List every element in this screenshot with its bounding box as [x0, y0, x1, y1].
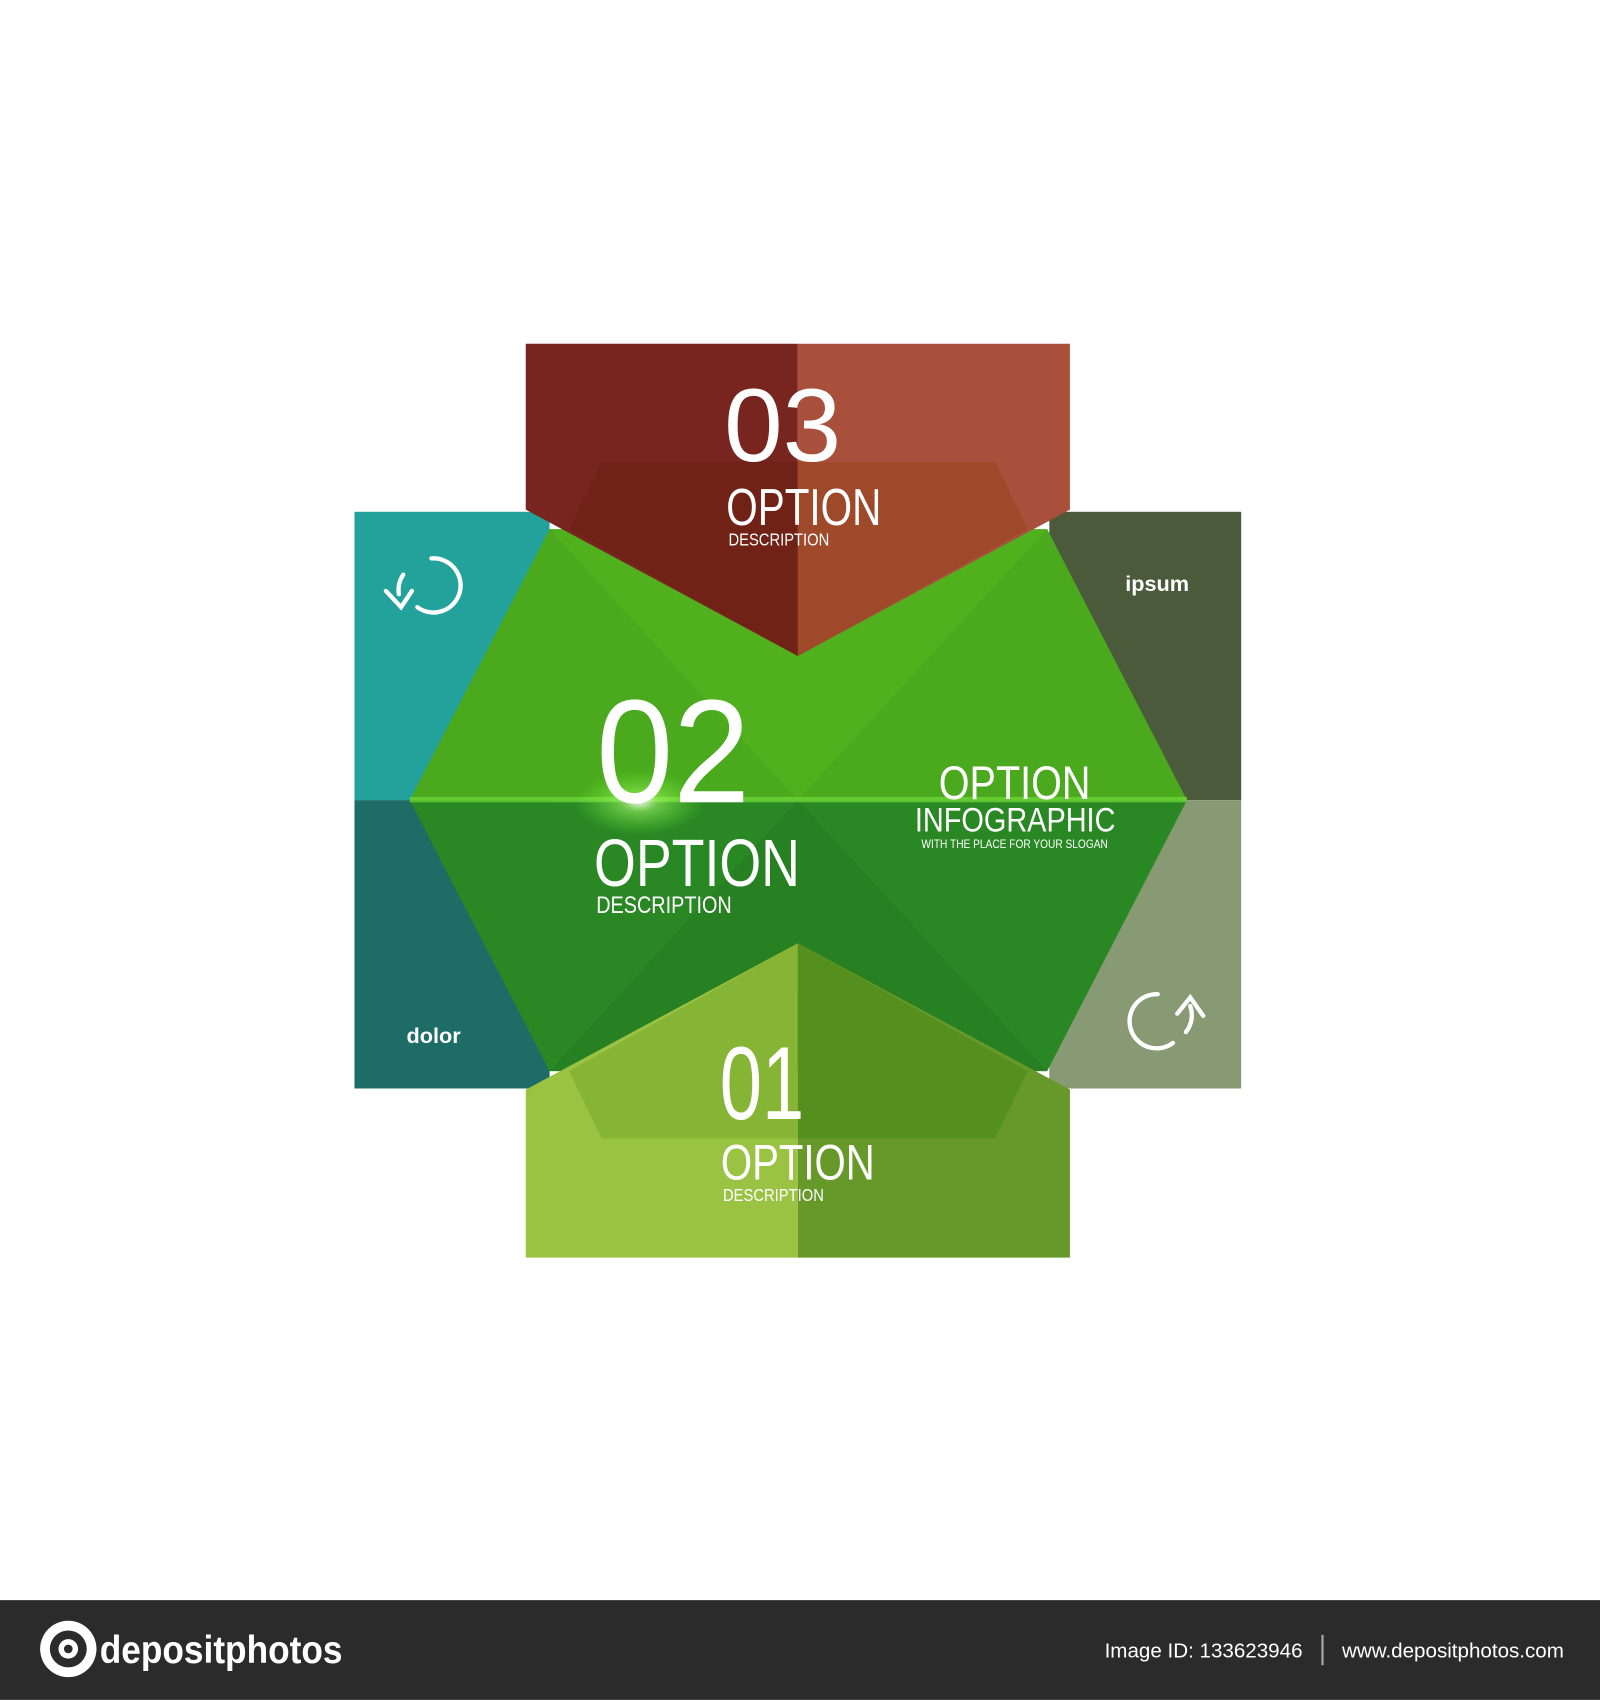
text: option infographic slogan — [915, 757, 1115, 851]
panel: right olive — [1049, 512, 1241, 1088]
footer: depositphotos — [100, 1629, 343, 1672]
text: 03 option — [724, 368, 881, 549]
text: 01 option: OPTION — [721, 1135, 875, 1191]
text: ipsum: ipsum — [1125, 571, 1189, 596]
text: 02 option: 02 — [596, 670, 750, 834]
text: 03 option: 03 — [724, 368, 841, 484]
panel: central green hexagon — [410, 529, 1187, 1071]
footer: Image ID: 133623946 — [1105, 1640, 1303, 1663]
text: 01 option: 01 — [720, 1026, 804, 1142]
panel: left teal — [354, 512, 550, 1088]
text: 01 option: DESCRIPTION — [723, 1185, 824, 1205]
text: 01 option — [720, 1026, 875, 1205]
icon: circular arrow left — [386, 558, 461, 613]
text: 03 option: DESCRIPTION — [728, 529, 829, 549]
text: option infographic slogan: INFOGRAPHIC — [915, 802, 1115, 840]
footer: www.depositphotos.com — [1341, 1640, 1564, 1663]
text: 02 option: OPTION — [594, 826, 800, 901]
text: 02 option — [594, 670, 800, 919]
panel: top option 03 — [526, 344, 1070, 656]
text: option infographic slogan: WITH THE PLACE FOR YOUR SLOGAN — [921, 837, 1108, 851]
panel: bottom option 01 — [526, 943, 1070, 1258]
text: 02 option: DESCRIPTION — [596, 892, 732, 919]
footer — [0, 1600, 1600, 1700]
icon: glow — [575, 770, 705, 835]
icon: circular arrow right — [1130, 994, 1203, 1048]
text: 03 option: OPTION — [726, 479, 881, 537]
icon: depositphotos logo — [40, 1621, 96, 1677]
text: dolor: dolor — [407, 1023, 461, 1048]
text: option infographic slogan: OPTION — [939, 757, 1091, 810]
